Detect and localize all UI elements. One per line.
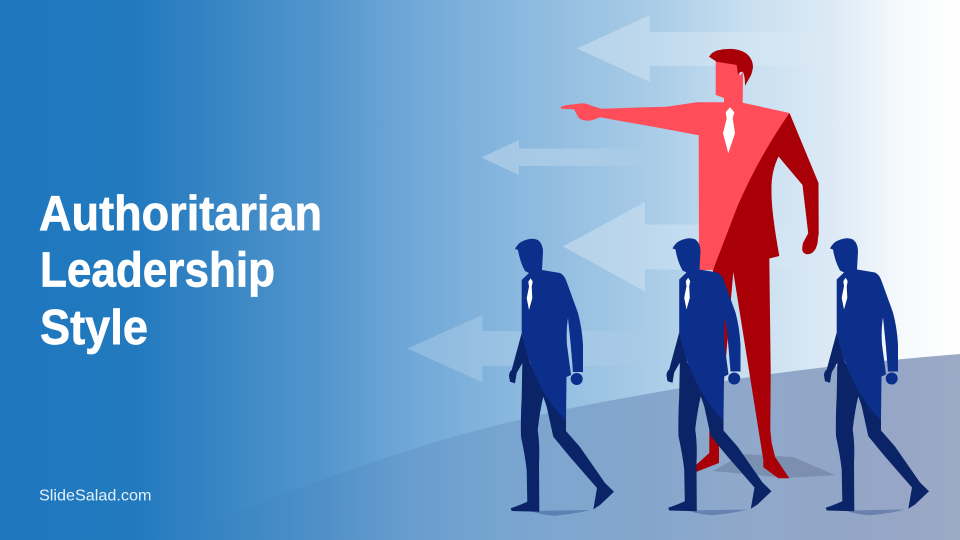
blue follower 3 <box>824 238 929 515</box>
follower shadow <box>846 510 905 515</box>
title: Leadership <box>40 244 275 298</box>
follower suit and head <box>672 238 740 420</box>
follower hand <box>886 372 898 384</box>
blue follower 1 <box>509 239 614 516</box>
brand text: SlideSalad.com <box>39 488 152 504</box>
title: Style <box>40 301 148 355</box>
follower suit and head <box>515 239 583 421</box>
blue follower 2 <box>666 238 772 515</box>
follower suit and head <box>830 238 898 420</box>
leader hair <box>709 49 753 86</box>
arrow: bottom <box>408 315 650 382</box>
follower shadow <box>531 510 590 516</box>
arrow: second <box>482 140 650 175</box>
follower legs and back arm <box>824 332 929 511</box>
title: Authoritarian <box>39 187 322 241</box>
follower tie <box>842 278 848 310</box>
arrow: top <box>577 15 830 82</box>
follower hand <box>728 372 740 384</box>
follower legs and back arm <box>666 332 772 511</box>
arrows pointing left <box>408 15 830 382</box>
ground slope <box>150 354 960 540</box>
red leader figure pointing left <box>561 49 819 478</box>
leader tie <box>723 107 735 153</box>
follower shadow <box>688 510 748 515</box>
follower tie <box>684 278 690 310</box>
leader fist <box>802 233 819 254</box>
follower hand <box>571 373 583 385</box>
leader shadow <box>713 454 835 478</box>
title <box>39 187 322 355</box>
leader trousers and shaded side <box>696 113 819 478</box>
follower tie <box>527 278 533 310</box>
follower legs and back arm <box>509 333 614 512</box>
arrow: third <box>563 202 810 292</box>
leader jacket, arm and head <box>561 61 790 270</box>
